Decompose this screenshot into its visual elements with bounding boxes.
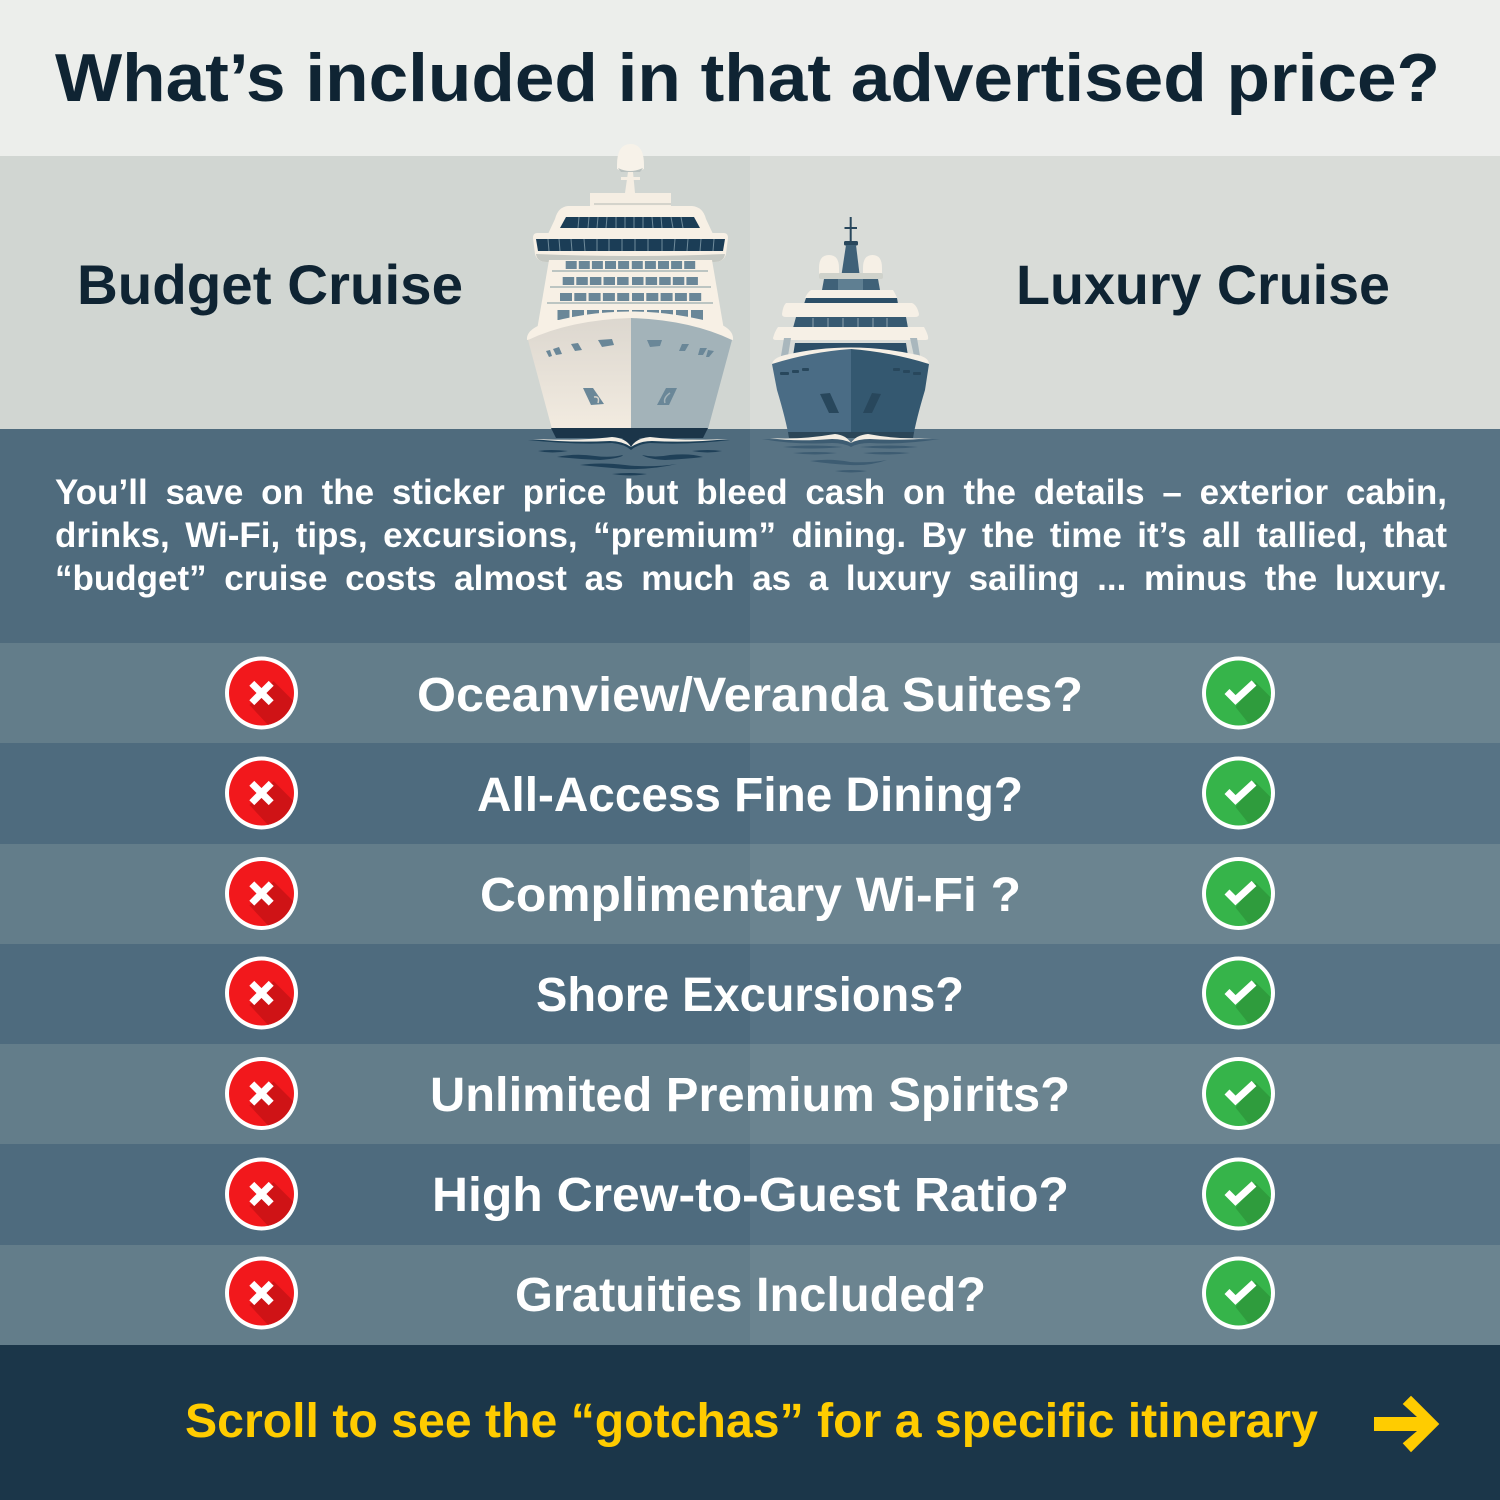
row 2 label: All-Access Fine Dining? xyxy=(477,769,1023,822)
row 5 label: Unlimited Premium Spirits? xyxy=(430,1069,1070,1122)
intro paragraph: drinks, Wi-Fi, tips, excursions, “premium” dining. By the time it’s all tallied, that xyxy=(55,516,1447,555)
background: sky band xyxy=(0,156,1500,429)
row 6 label: High Crew-to-Guest Ratio? xyxy=(432,1169,1069,1222)
heading: Budget Cruise: Budget Cruise xyxy=(77,253,463,316)
intro paragraph: You’ll save on the sticker price but bleed cash on the details – exterior cabin, xyxy=(55,473,1447,512)
icon: green check row 1 xyxy=(1202,656,1280,732)
background: water band xyxy=(0,429,1500,643)
icon: large budget cruise ship xyxy=(527,144,733,448)
row 7 label: Gratuities Included? xyxy=(515,1269,986,1322)
icon: red cross row 1 xyxy=(225,656,302,734)
comparison table rows xyxy=(0,643,1500,1345)
icon: red cross row 7 xyxy=(225,1256,302,1334)
icon: red cross row 2 xyxy=(225,756,302,834)
icon: green check row 3 xyxy=(1202,857,1280,932)
heading: Luxury Cruise: Luxury Cruise xyxy=(1016,253,1390,316)
icon: red cross row 3 xyxy=(225,857,302,934)
row 4 label: Shore Excursions? xyxy=(536,969,964,1022)
icon: red cross row 4 xyxy=(225,956,302,1034)
icon: green check row 5 xyxy=(1202,1057,1280,1132)
icon: small luxury cruise ship xyxy=(772,217,929,438)
intro paragraph xyxy=(55,473,1447,598)
icon: green check row 7 xyxy=(1202,1256,1280,1332)
icon: red cross row 5 xyxy=(225,1057,302,1134)
row 1 label: Oceanview/Veranda Suites? xyxy=(417,669,1083,722)
icon: green check row 2 xyxy=(1202,756,1280,832)
icon: green check row 6 xyxy=(1202,1158,1280,1233)
footer call to action: Scroll to see the “gotchas” for a specific itinerary xyxy=(185,1395,1318,1448)
row 3 label: Complimentary Wi-Fi ? xyxy=(480,869,1021,922)
title: What’s included in that advertised price? xyxy=(55,40,1440,116)
icon: yellow arrow xyxy=(1374,1396,1439,1452)
footer band xyxy=(0,1345,1500,1500)
icon: red cross row 6 xyxy=(225,1158,302,1235)
icon: bow waves for luxury ship xyxy=(762,434,940,472)
icon: green check row 4 xyxy=(1202,956,1280,1032)
intro paragraph: “budget” cruise costs almost as much as a luxury sailing ... minus the luxury. xyxy=(55,559,1447,598)
icon: bow waves for budget ship xyxy=(528,437,730,476)
background: title band xyxy=(0,0,1500,156)
